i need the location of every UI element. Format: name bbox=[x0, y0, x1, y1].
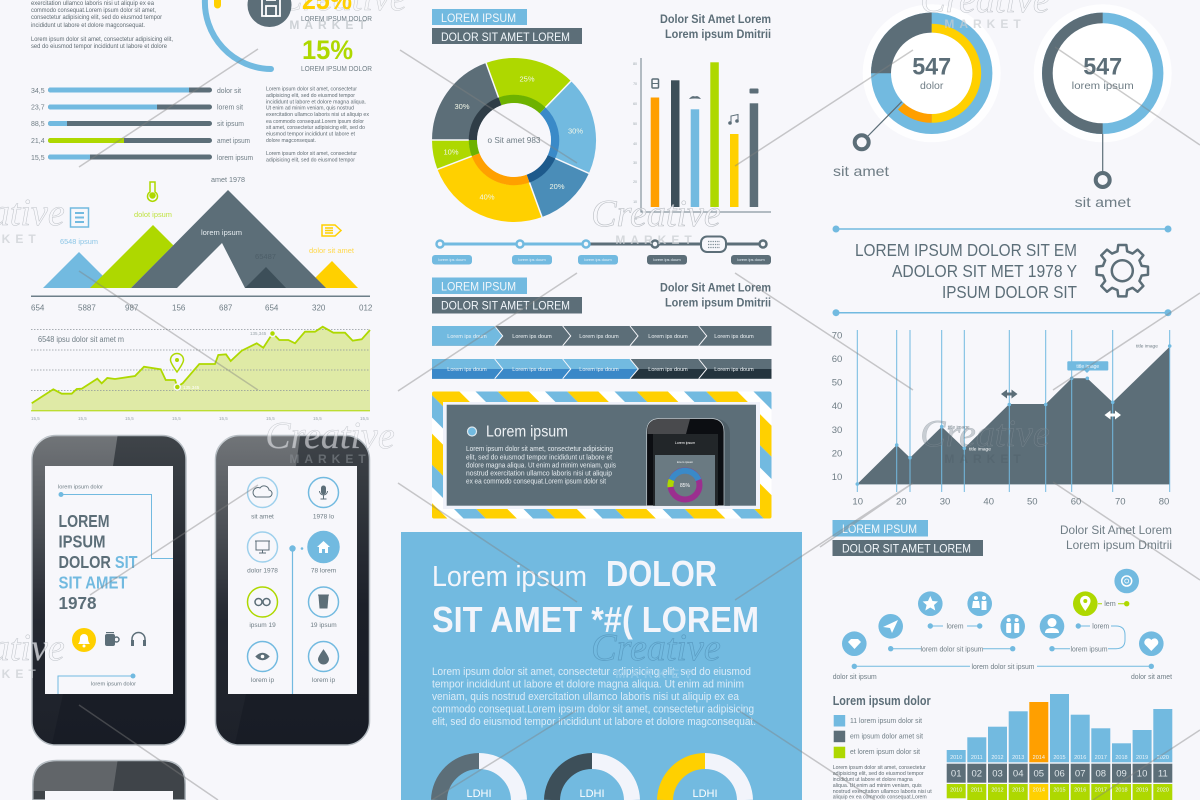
legend with text: Lorem ipsum dolor sit amet, consectetur bbox=[833, 765, 926, 771]
area line chart: 15,5 bbox=[31, 416, 40, 421]
panel headline: DOLOR bbox=[606, 553, 717, 594]
stacked column chart: 2010 bbox=[950, 788, 962, 794]
icon: dark double arrow bbox=[1001, 390, 1018, 398]
arrow process row 1: Lorem ips doum bbox=[579, 334, 619, 340]
stacked column chart: 2016 bbox=[1074, 788, 1086, 794]
donut: yellow: LDHI bbox=[692, 788, 718, 800]
panel body text bbox=[432, 666, 756, 728]
area line chart: 15,5 bbox=[172, 416, 181, 421]
vertical bar chart: 40 bbox=[633, 142, 637, 146]
area line chart: 15,5 bbox=[313, 416, 322, 421]
area line chart: 15,5 bbox=[266, 416, 275, 421]
panel body text: Lorem ipsum dolor sit amet, consectetur adipisicing elit, sed do eiusmod bbox=[432, 666, 751, 678]
timeline icon glyphs bbox=[848, 596, 1158, 651]
vertical bar chart: 20 bbox=[633, 180, 637, 184]
stacked column chart: 2019 bbox=[1136, 755, 1148, 761]
stacked column chart: 2015 bbox=[1053, 788, 1066, 794]
text block beside bars bbox=[266, 86, 369, 164]
range area chart: 10 bbox=[852, 496, 863, 508]
range area chart: 70 bbox=[1115, 496, 1126, 508]
heading labels: pie section: DOLOR SIT AMET LOREM bbox=[441, 30, 570, 44]
arrow process row 1: Lorem ips doum bbox=[648, 334, 688, 340]
phone 1 bbox=[32, 436, 186, 745]
donut: yellow bbox=[665, 761, 745, 800]
range area chart: 40 bbox=[832, 401, 842, 412]
icon labels: 1978 lo bbox=[313, 514, 335, 520]
stacked column chart: 03 bbox=[992, 768, 1003, 780]
stacked column chart: 10 bbox=[1137, 768, 1147, 780]
stacked column chart: 2012 bbox=[991, 788, 1004, 794]
stacked column chart: 2013 bbox=[1012, 788, 1024, 794]
panel paragraph: elit, sed do eiusmod tempor incididunt ut labore et bbox=[466, 454, 612, 462]
top-left text block bbox=[31, 0, 173, 50]
horizontal bar list: amet ipsum bbox=[217, 138, 250, 145]
watermark: Creative Market blue panel: MARKET bbox=[615, 667, 697, 681]
mountain chart: 65487 bbox=[255, 252, 276, 261]
donut pie chart: 10% bbox=[443, 148, 459, 156]
top-left text block: incididunt ut labore et dolore magconsequat. bbox=[31, 22, 145, 29]
icon labels: dolor 1978 bbox=[247, 568, 278, 574]
icon labels: lorem ip bbox=[251, 677, 274, 684]
icon timeline: dolor sit ipsum bbox=[833, 672, 877, 681]
icon labels bbox=[247, 514, 337, 684]
range area chart: 10 bbox=[832, 472, 842, 483]
icon buttons bbox=[248, 478, 339, 672]
area line chart: 6548 ipsu dolor sit amet m bbox=[38, 335, 124, 344]
panel headline bbox=[432, 553, 759, 640]
arrow process row 2: Lorem ips doum bbox=[579, 367, 619, 373]
ring gauge 1: dolor bbox=[920, 80, 944, 92]
stacked column chart: 2013 bbox=[1012, 755, 1024, 761]
text block beside bars: Lorem ipsum dolor sit amet, consectetur bbox=[266, 86, 357, 92]
icon: tag bbox=[322, 225, 341, 236]
icon: map pin bbox=[170, 354, 184, 372]
heading labels: pie section: Dolor Sit Amet Lorem bbox=[660, 12, 771, 26]
arrow process row 2: Lorem ips doum bbox=[714, 367, 754, 373]
icon timeline: lorem bbox=[1092, 622, 1109, 631]
top-left text block: exercitation ullamco laboris nisi ut aliquip ex ea bbox=[31, 0, 154, 7]
stacked column chart: 2012 bbox=[991, 755, 1004, 761]
panel title: Lorem ipsum bbox=[486, 424, 568, 440]
gear headline block: ADOLOR SIT MET 1978 Y bbox=[892, 261, 1077, 281]
text block beside bars: exercitation ullamco laboris nisi ut aliquip ex bbox=[266, 112, 369, 118]
mountain chart: amet 1978 bbox=[211, 175, 245, 184]
heading labels: icon timeline: DOLOR SIT AMET LOREM bbox=[842, 542, 971, 556]
mountain chart: dolor sit amet bbox=[309, 246, 355, 255]
range area chart: 20 bbox=[896, 496, 907, 508]
arrow process row 1: Lorem ips doum bbox=[447, 334, 487, 340]
horizontal bar list: 23,7 bbox=[31, 104, 45, 112]
phone headline bbox=[58, 511, 138, 613]
watermark: Creative Market right: MARKET bbox=[944, 452, 1026, 466]
donut pie chart: o Sit amet 983 bbox=[488, 135, 541, 145]
phone 1: lorem ipsum dolor bbox=[91, 682, 136, 688]
heading labels: icon timeline: LOREM IPSUM bbox=[842, 522, 917, 536]
arrow process row 2: Lorem ips doum bbox=[447, 367, 487, 373]
legend with text: 11 lorem ipsum dolor sit bbox=[850, 718, 922, 725]
panel paragraph: ex ea commodo consequat.Lorem ipsum dolor sit bbox=[466, 478, 606, 486]
stacked column chart: 2017 bbox=[1095, 788, 1107, 794]
panel body text: elit, sed do eiusmod tempor incididunt ut labore et dolore magconsequat. bbox=[432, 716, 756, 728]
stacked column chart: 01 bbox=[951, 768, 961, 780]
legend with text: aliqua. Ut enim ad minim veniam, quis bbox=[833, 783, 922, 789]
heading labels: icon timeline: Dolor Sit Amet Lorem bbox=[1060, 523, 1172, 537]
arrow process row 1 bbox=[432, 326, 772, 346]
timeline: lorem ips doum bbox=[518, 257, 546, 262]
heading labels: pie section: LOREM IPSUM bbox=[441, 11, 516, 25]
range area chart: 50 bbox=[1027, 496, 1038, 508]
icon labels: ipsum 19 bbox=[249, 622, 276, 629]
horizontal bar list: 88,5 bbox=[31, 121, 45, 128]
range area chart: 60 bbox=[832, 354, 842, 365]
range area chart: 80 bbox=[1159, 496, 1169, 508]
tooltip bbox=[1067, 361, 1108, 373]
stacked column chart: 2020 bbox=[1157, 788, 1169, 794]
text block beside bars: adipisicing elit, sed do eiusmod tempor bbox=[266, 158, 355, 164]
stacked column chart: 2019 bbox=[1136, 788, 1148, 794]
donut pie chart: 20% bbox=[549, 182, 565, 191]
stacked column chart: 2020 bbox=[1157, 755, 1169, 761]
donut: slate: LDHI bbox=[466, 788, 492, 800]
heading labels: icon timeline: Lorem ipsum Dmitrii bbox=[1066, 538, 1172, 552]
panel body text: tempor incididunt ut labore et dolore magna aliqua. Ut enim ad minim bbox=[432, 678, 744, 690]
stacked column chart: 2016 bbox=[1074, 755, 1086, 761]
range area chart: 70 bbox=[832, 330, 842, 342]
stacked column chart: 2014 bbox=[1033, 788, 1045, 794]
stacked column chart: 2010 bbox=[950, 755, 962, 761]
radial gauge with percentages: LOREM IPSUM DOLOR bbox=[301, 14, 373, 23]
range area chart: 30 bbox=[832, 425, 842, 436]
donut: dark bbox=[552, 761, 632, 800]
area line chart bbox=[31, 327, 370, 421]
stacked column chart: 09 bbox=[1116, 768, 1127, 780]
mountain chart: lorem ipsum bbox=[201, 228, 242, 237]
heading labels: arrows section: Lorem ipsum Dmitrii bbox=[665, 296, 771, 310]
text block beside bars: incididunt ut labore et dolore magna aliqua. bbox=[266, 99, 366, 105]
icon timeline: lorem dolor sit ipsum bbox=[972, 662, 1035, 671]
legend with text: em ipsum dolor amet sit bbox=[850, 734, 923, 740]
panel paragraph: nostrud exercitation ullamco laboris nisi ut aliquip bbox=[466, 470, 612, 478]
stacked column chart: 2015 bbox=[1053, 755, 1066, 761]
area line chart: 15,5 bbox=[78, 416, 87, 421]
stacked column chart: 08 bbox=[1096, 768, 1106, 780]
phone 2 bbox=[216, 436, 370, 745]
donut pie chart: 30% bbox=[568, 126, 583, 136]
striped airmail panel bbox=[432, 392, 772, 518]
vertical bar chart: 50 bbox=[633, 122, 637, 126]
radial gauge with percentages bbox=[205, 0, 373, 73]
ring gauge 1 bbox=[833, 4, 1001, 179]
mountain chart: dolot ipsum bbox=[134, 210, 172, 219]
text block beside bars: adipisicing elit, sed do eiusmod tempor bbox=[266, 93, 355, 99]
phone 3 bbox=[33, 760, 185, 800]
icon: headphones bbox=[132, 632, 145, 646]
range area chart bbox=[832, 330, 1171, 508]
watermark: Creative Market right: Creative bbox=[920, 413, 1050, 455]
donut pie chart: 40% bbox=[479, 192, 495, 202]
mountain chart: 5887 bbox=[78, 304, 96, 312]
icon: gear bbox=[1097, 245, 1148, 296]
icon timeline bbox=[833, 569, 1172, 681]
panel headline: Lorem ipsum bbox=[432, 561, 587, 593]
vertical bar chart: 70 bbox=[633, 82, 637, 86]
arrow process row 2: Lorem ips doum bbox=[648, 367, 688, 373]
range area chart: 60 bbox=[1071, 496, 1081, 508]
icon labels: lorem ip bbox=[312, 677, 335, 684]
watermark: Creative Market top left bbox=[277, 0, 407, 32]
stacked column chart: 2017 bbox=[1095, 755, 1107, 761]
tooltip: title image bbox=[1076, 364, 1099, 370]
horizontal bar list: 34,5 bbox=[31, 88, 45, 95]
mountain chart: 320 bbox=[312, 304, 326, 312]
panel body text: veniam, quis nostrud exercitation ullamco laboris nisi ut aliquip ex ea bbox=[432, 691, 740, 703]
phone headline: LOREM bbox=[58, 511, 110, 531]
radial gauge with percentages: LOREM IPSUM DOLOR bbox=[301, 64, 373, 73]
icon timeline: lem bbox=[1104, 599, 1116, 608]
area line chart: 135,345 bbox=[250, 331, 267, 336]
panel body text: commodo consequat.Lorem ipsum dolor sit amet, consectetur adipisicing bbox=[432, 704, 754, 716]
heading labels: arrows section: Dolor Sit Amet Lorem bbox=[660, 280, 771, 294]
gear headline block: IPSUM DOLOR SIT bbox=[942, 282, 1077, 302]
mountain chart: 654 bbox=[31, 304, 45, 312]
text block beside bars: Ut enim ad minim veniam, quis nostrud bbox=[266, 106, 354, 112]
watermark: Creative Market center: MARKET bbox=[615, 233, 697, 247]
text block beside bars: sit amet, consectetur adipisicing elit, sed do bbox=[266, 125, 365, 131]
watermark: Creative Market left bbox=[0, 192, 65, 681]
watermark: Creative Market phone: MARKET bbox=[289, 452, 371, 466]
horizontal bar list: lorem ipsum bbox=[217, 155, 253, 162]
heading labels: pie section: Lorem ipsum Dmitrii bbox=[665, 27, 771, 41]
icon: document bbox=[70, 208, 88, 227]
horizontal bar list: 21,4 bbox=[31, 138, 45, 145]
donut: dark: LDHI bbox=[579, 788, 605, 800]
watermark: Creative Market top right: MARKET bbox=[944, 17, 1026, 31]
icon: floppy disk bbox=[262, 0, 280, 16]
donut: slate bbox=[439, 761, 519, 800]
area line chart: 15,5 bbox=[219, 416, 228, 421]
area line chart: 15,5 bbox=[360, 416, 369, 421]
stacked column chart: 2011 bbox=[971, 788, 983, 794]
vertical bar chart: 80 bbox=[633, 62, 637, 66]
arrow process row 1: Lorem ips doum bbox=[512, 334, 552, 340]
arrow process row 2: Lorem ips doum bbox=[512, 367, 552, 373]
icon: keypad bbox=[701, 236, 726, 252]
horizontal bar list: sit ipsum bbox=[217, 121, 244, 128]
stacked column chart: 11 bbox=[1158, 768, 1168, 780]
phone headline: DOLOR SIT bbox=[58, 552, 138, 572]
icon: thermometer bbox=[148, 182, 158, 201]
icon timeline: lorem ipsum bbox=[1070, 644, 1108, 654]
stacked column chart: 05 bbox=[1034, 768, 1044, 780]
heading labels: arrows section: LOREM IPSUM bbox=[441, 280, 516, 294]
donut pie chart: 25% bbox=[519, 74, 535, 84]
vertical bar chart: 30 bbox=[633, 161, 637, 165]
panel headline: SIT AMET *#( LOREM bbox=[432, 599, 759, 640]
phone headline: 1978 bbox=[58, 593, 97, 613]
text block beside bars: dolore magconsequat. bbox=[266, 138, 316, 144]
phone headline: IPSUM bbox=[58, 532, 106, 552]
stacked column chart: 2011 bbox=[971, 755, 983, 761]
ring gauge 1: sit amet bbox=[833, 163, 889, 179]
watermark: Creative Market center: Creative bbox=[591, 193, 721, 235]
icon labels: 19 ipsum bbox=[310, 622, 337, 629]
phone 1: lorem ipsum dolor bbox=[58, 484, 103, 490]
mini phone: Lorem ipsum bbox=[675, 441, 695, 445]
legend with text: adipisicing elit, sed do eiusmod tempor bbox=[833, 771, 924, 777]
legend with text: et lorem ipsum dolor sit bbox=[850, 749, 920, 756]
mini phone: 85% bbox=[680, 483, 691, 489]
blue panel bbox=[401, 532, 802, 800]
mountain chart: 987 bbox=[125, 304, 139, 312]
heading labels: arrows section: DOLOR SIT AMET LOREM bbox=[441, 298, 570, 312]
range area chart: 40 bbox=[983, 496, 994, 508]
timeline: lorem ips doum bbox=[737, 257, 765, 262]
mountain chart: 654 bbox=[265, 304, 279, 312]
mountain chart: 012 bbox=[359, 304, 373, 312]
mountain chart: 687 bbox=[219, 304, 233, 312]
range area chart: 50 bbox=[832, 378, 842, 388]
vertical bar chart: 0 bbox=[635, 217, 637, 221]
timeline: lorem ips doum bbox=[584, 257, 612, 262]
donut pie chart bbox=[424, 50, 604, 230]
heading labels: arrows section bbox=[432, 278, 771, 314]
watermark: Creative Market blue panel: Creative bbox=[591, 627, 721, 669]
ring gauge 2: 547 bbox=[1083, 54, 1122, 80]
legend with text: Lorem ipsum dolor bbox=[833, 694, 931, 708]
legend with text: nostrud exercitation ullamco laboris nisi ut bbox=[833, 789, 932, 795]
stacked column chart: 2018 bbox=[1115, 788, 1128, 794]
top-left text block: consectetur adipisicing elit, sed do eiusmod tempor bbox=[31, 14, 162, 21]
panel paragraph bbox=[466, 446, 616, 486]
mini phone: lorem ipsum bbox=[677, 460, 694, 464]
range area chart: 20 bbox=[832, 448, 842, 460]
icon: white double arrow bbox=[1104, 410, 1121, 420]
mountain chart: 6548 ipsum bbox=[60, 237, 98, 246]
horizontal bar list bbox=[31, 88, 253, 162]
watermark: Creative Market top left: MARKET bbox=[289, 18, 371, 32]
horizontal bar list: lorem sit bbox=[217, 104, 243, 112]
range area chart: title image bbox=[948, 424, 970, 430]
icon set bbox=[253, 486, 330, 664]
timeline: lorem ips doum bbox=[653, 257, 681, 262]
area line chart: 135,345 bbox=[183, 385, 200, 390]
stacked column chart: 06 bbox=[1054, 768, 1065, 780]
panel paragraph: Lorem ipsum dolor sit amet, consectetur adipisicing bbox=[466, 446, 613, 453]
vertical bar chart: 60 bbox=[633, 102, 637, 106]
mini phone bbox=[647, 418, 730, 506]
heading labels: icon timeline bbox=[832, 520, 1172, 556]
ring gauge 2: sit amet bbox=[1075, 194, 1131, 210]
panel paragraph: dolore magna aliqua. Ut enim ad minim veniam, quis bbox=[466, 462, 616, 470]
ring gauge 2 bbox=[1034, 4, 1172, 210]
text block beside bars: eiusmod tempor incididunt ut labore et bbox=[266, 132, 355, 138]
icon timeline: lorem dolor sit ipsum bbox=[920, 644, 984, 654]
mountain chart bbox=[31, 175, 373, 312]
ring gauge 2: lorem ipsum bbox=[1072, 80, 1134, 92]
horizontal bar list: 15,5 bbox=[31, 155, 45, 162]
text block beside bars: Lorem ipsum dolor sit amet, consectetur bbox=[266, 151, 357, 157]
watermark: Creative Market top right bbox=[920, 0, 1050, 31]
top-left text block: commodo consequat.Lorem ipsum dolor sit amet, bbox=[31, 7, 156, 14]
stacked column chart: 04 bbox=[1013, 768, 1023, 780]
arrow process row 1: Lorem ips doum bbox=[714, 334, 754, 340]
horizontal bar list: dolor sit bbox=[217, 88, 241, 95]
stacked column chart: 02 bbox=[972, 768, 982, 780]
icon labels: 78 lorem bbox=[311, 568, 336, 574]
timeline: lorem ips doum bbox=[438, 257, 466, 262]
icon labels: sit amet bbox=[251, 514, 274, 520]
range area chart: 30 bbox=[940, 496, 950, 508]
mountain chart: 156 bbox=[172, 304, 186, 312]
range area chart: title image bbox=[1136, 344, 1158, 350]
arrow process row 2 bbox=[432, 359, 772, 379]
timeline bbox=[432, 236, 771, 264]
ring gauge 1: 547 bbox=[912, 54, 951, 80]
vertical bar chart bbox=[633, 58, 771, 221]
icons above bars bbox=[652, 79, 758, 125]
text block beside bars: ea commodo consequat.Lorem ipsum dolor bbox=[266, 119, 364, 125]
radial gauge with percentages: 15% bbox=[302, 35, 353, 65]
top-left text block: sed do eiusmod tempor incididunt ut labore et dolore bbox=[31, 43, 167, 50]
icon: bell bbox=[72, 628, 96, 652]
icon: coffee cup bbox=[105, 632, 119, 646]
legend with text: incididunt ut labore et dolore magna bbox=[833, 777, 913, 783]
heading labels: pie section bbox=[432, 9, 771, 44]
phone headline: SIT AMET bbox=[58, 572, 128, 592]
gear headline block: LOREM IPSUM DOLOR SIT EM bbox=[855, 240, 1077, 260]
area line chart: 15,5 bbox=[125, 416, 134, 421]
gear headline block bbox=[832, 226, 1172, 316]
stacked column chart bbox=[947, 694, 1172, 800]
vertical bar chart: 10 bbox=[633, 200, 637, 204]
icon timeline: dolor sit amet bbox=[1131, 672, 1172, 681]
icon timeline: lorem bbox=[946, 622, 964, 631]
top-left text block: Lorem ipsum dolor sit amet, consectetur adipisicing elit, bbox=[31, 36, 173, 43]
stacked column chart: 2014 bbox=[1033, 755, 1045, 761]
donut pie chart: 30% bbox=[454, 102, 470, 111]
watermark: Creative Market phone: Creative bbox=[265, 415, 395, 457]
stacked column chart: 2018 bbox=[1115, 755, 1128, 761]
stacked column chart: 07 bbox=[1075, 768, 1085, 780]
legend with text bbox=[833, 694, 932, 800]
range area chart: title image bbox=[969, 446, 991, 452]
